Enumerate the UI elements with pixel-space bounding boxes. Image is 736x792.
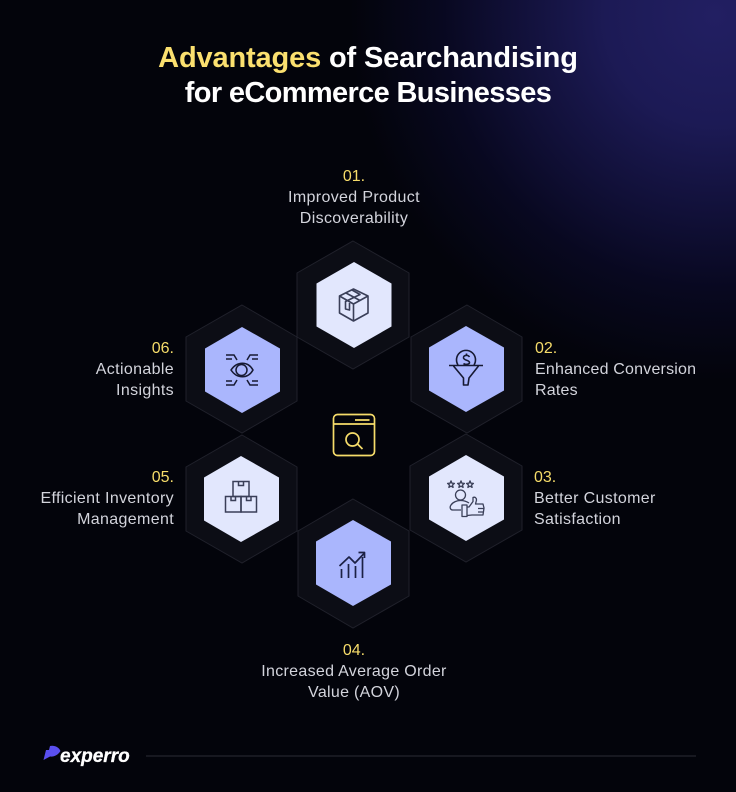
label 03: Satisfaction	[534, 511, 621, 528]
hexagon 04 with growth chart icon	[298, 499, 409, 628]
label 03	[534, 469, 656, 528]
label 02: Rates	[535, 382, 578, 399]
label 03: 03.	[534, 469, 556, 486]
label 01: Discoverability	[300, 210, 408, 227]
hexagon 05 with stacked boxes icon	[186, 435, 297, 563]
title	[158, 42, 578, 108]
label 05: 05.	[152, 469, 174, 486]
label 05	[40, 469, 174, 528]
logo mark	[44, 746, 60, 760]
footer divider	[146, 755, 696, 757]
label 04: 04.	[343, 642, 365, 659]
label 06: 06.	[152, 340, 174, 357]
label 02	[535, 340, 696, 399]
title: for eCommerce Businesses	[185, 76, 551, 108]
label 04: Value (AOV)	[308, 684, 400, 701]
center search window icon	[334, 414, 374, 456]
label 03: Better Customer	[534, 490, 656, 507]
logo wordmark: experro	[60, 746, 130, 767]
hexagon 06 with eye icon	[186, 305, 297, 433]
hexagon 03 with customer rating icon	[410, 434, 522, 562]
label 05: Efficient Inventory	[40, 490, 174, 507]
label 04	[261, 642, 447, 701]
label 05: Management	[77, 511, 174, 528]
label 06	[96, 340, 174, 399]
label 01: 01.	[343, 168, 365, 185]
label 02: Enhanced Conversion	[535, 361, 696, 378]
label 01	[288, 168, 420, 227]
label 06: Actionable	[96, 361, 174, 378]
label 06: Insights	[116, 382, 174, 399]
hexagon 01 with box icon	[297, 241, 409, 369]
label 02: 02.	[535, 340, 557, 357]
label 01: Improved Product	[288, 189, 420, 206]
label 04: Increased Average Order	[261, 663, 447, 680]
title: Advantages of Searchandising	[158, 42, 578, 74]
hexagon 02 with funnel icon	[411, 305, 522, 433]
